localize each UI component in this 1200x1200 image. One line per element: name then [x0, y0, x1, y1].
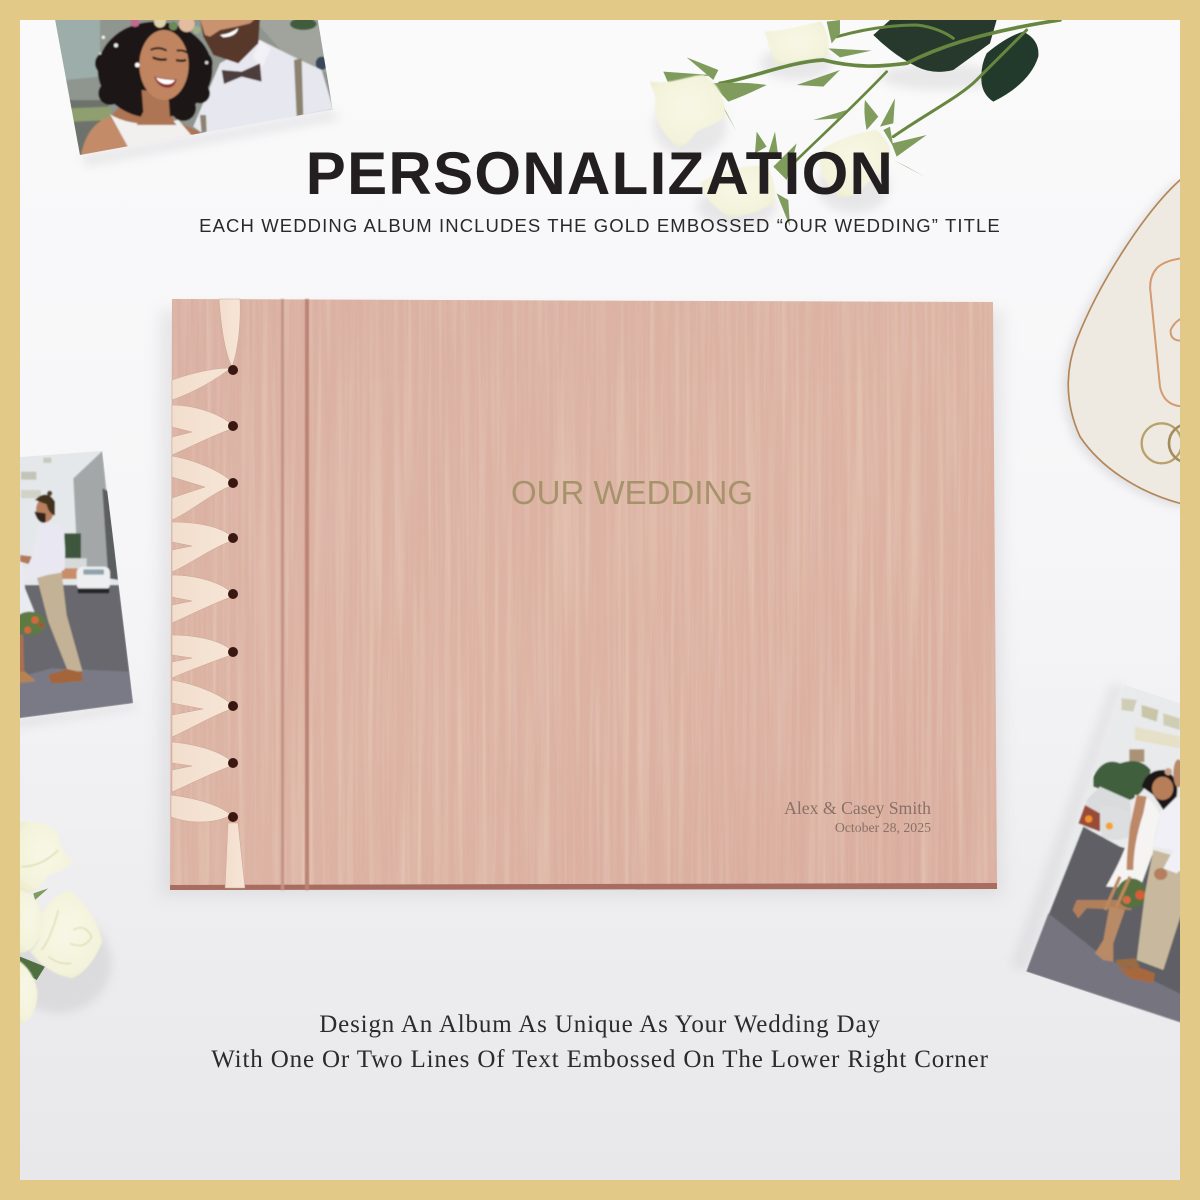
groom	[193, 40, 333, 135]
title: PERSONALIZATION	[306, 140, 894, 207]
rose shadows	[653, 47, 1000, 227]
bouquet	[1117, 878, 1147, 908]
ribbon lacing	[171, 299, 245, 888]
subtitle: EACH WEDDING ALBUM INCLUDES THE GOLD EMBOSSED “OUR WEDDING” TITLE	[199, 215, 1001, 236]
spine groove	[281, 299, 309, 890]
album title: gold emboss: OUR WEDDING	[511, 474, 753, 511]
stems	[720, 20, 1060, 167]
sepals	[663, 20, 927, 227]
photo: bride and groom portrait	[50, 16, 340, 167]
bride edge	[20, 584, 36, 616]
ribbon holes	[228, 365, 238, 822]
man's pants, shoes and shirt	[1136, 850, 1180, 971]
bottom edge	[170, 883, 997, 890]
car	[77, 567, 110, 590]
linen texture	[170, 299, 998, 891]
album: blush linen cover	[170, 299, 998, 891]
dark leaves	[873, 20, 1038, 102]
album names: embossed text	[784, 798, 931, 835]
album names: embossed text: Alex & Casey Smith	[784, 798, 931, 818]
groom	[37, 573, 82, 672]
caption text	[211, 1011, 989, 1073]
caption text: With One Or Two Lines Of Text Embossed On The Lower Right Corner	[211, 1046, 989, 1073]
woman's head	[1142, 770, 1177, 810]
caption text: Design An Album As Unique As Your Wedding Day	[319, 1011, 881, 1038]
bride	[80, 116, 128, 155]
album shadow	[160, 310, 1002, 896]
flowers: white roses lower left	[5, 822, 112, 1024]
photo: groom and bride on street, left	[14, 445, 148, 728]
woman's legs and heels	[1073, 900, 1132, 918]
dish: ceramic tray with line art and gold rings	[1063, 180, 1200, 506]
album names: embossed text: October 28, 2025	[835, 820, 931, 835]
dress	[1106, 795, 1160, 888]
flowers: white roses and leaves	[650, 20, 1060, 227]
roses	[650, 22, 890, 217]
photo: couple walking, right	[1015, 685, 1180, 1023]
